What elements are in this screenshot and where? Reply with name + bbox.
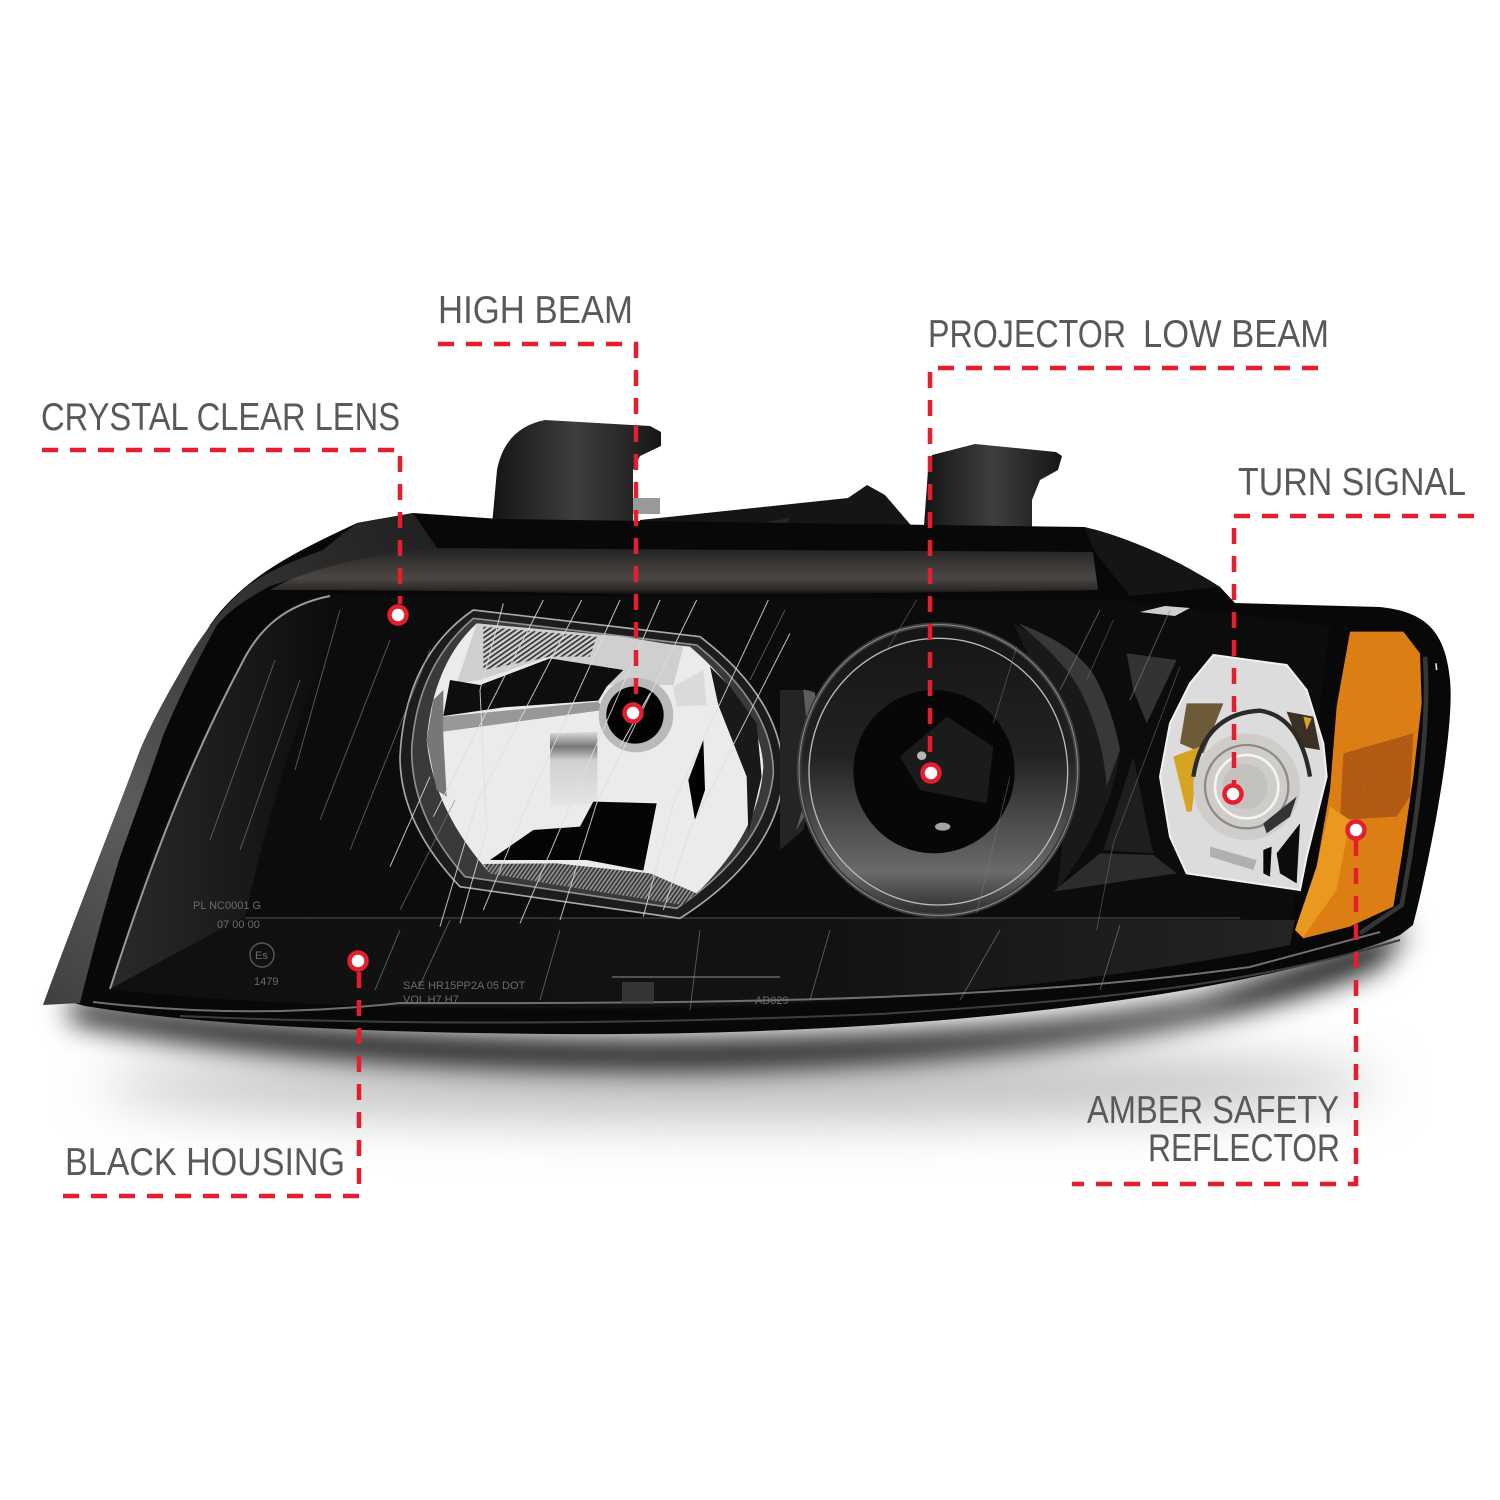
label: high beam: HIGH BEAM — [438, 289, 633, 332]
outer black housing — [74, 513, 1451, 1034]
rear mounting brackets — [492, 420, 1075, 550]
textured gasket edge — [43, 513, 440, 1005]
turn signal reflector — [1160, 655, 1327, 890]
top textured band — [270, 548, 1098, 594]
molded lens markings: VOL H7 H7 — [403, 994, 459, 1006]
bottom lens edge highlights — [93, 932, 1400, 1023]
ground shadow — [70, 925, 1410, 1119]
label: amber safety reflector: AMBER SAFETY — [1087, 1089, 1339, 1132]
amber reflector — [1295, 632, 1437, 938]
callout: crystal clear lens — [41, 396, 406, 624]
reflection lines — [390, 600, 790, 927]
label: projector low beam: PROJECTOR — [928, 313, 1126, 356]
projector lens — [853, 690, 1015, 853]
prismatic bulb lens — [1193, 733, 1300, 840]
shroud sweep — [1013, 623, 1120, 890]
projector low beam — [780, 600, 1180, 930]
callout: turn signal — [1224, 461, 1474, 802]
molded lens markings: Es — [255, 950, 268, 962]
lens interior — [108, 594, 1330, 1010]
callout: amber safety reflector — [1072, 822, 1364, 1184]
lens reflection lines — [210, 610, 1170, 1010]
projector outer ring — [799, 625, 1078, 915]
rear panels — [1127, 653, 1177, 723]
molded lens markings — [193, 900, 789, 1007]
molded lens markings: 1479 — [254, 976, 278, 988]
high beam reflector — [390, 600, 790, 927]
side marker frame — [1360, 657, 1426, 933]
lower trim strip — [110, 916, 1295, 1008]
left lens panel — [110, 596, 345, 989]
bulb shield — [599, 678, 673, 752]
molded lens markings: PL NC0001 G — [193, 900, 261, 912]
callout: black housing — [62, 952, 366, 1196]
callout: projector low beam — [922, 313, 1329, 782]
label: crystal clear lens: CRYSTAL CLEAR LENS — [41, 396, 400, 439]
label: black housing: BLACK HOUSING — [65, 1141, 345, 1184]
headlight assembly — [43, 420, 1451, 1034]
label: turn signal: TURN SIGNAL — [1238, 461, 1466, 504]
side fins — [780, 690, 822, 850]
molded lens markings: 07 00 00 — [217, 919, 260, 931]
label: amber safety reflector: REFLECTOR — [1148, 1127, 1340, 1170]
molded lens markings: AD029 — [755, 995, 789, 1007]
chrome reflector bowl — [427, 623, 763, 903]
upper corner glints — [1140, 606, 1190, 616]
molded lens markings: SAE HR15PP2A 05 DOT — [403, 980, 526, 992]
callout: high beam — [438, 289, 642, 722]
label: projector low beam: LOW BEAM — [1143, 313, 1329, 356]
